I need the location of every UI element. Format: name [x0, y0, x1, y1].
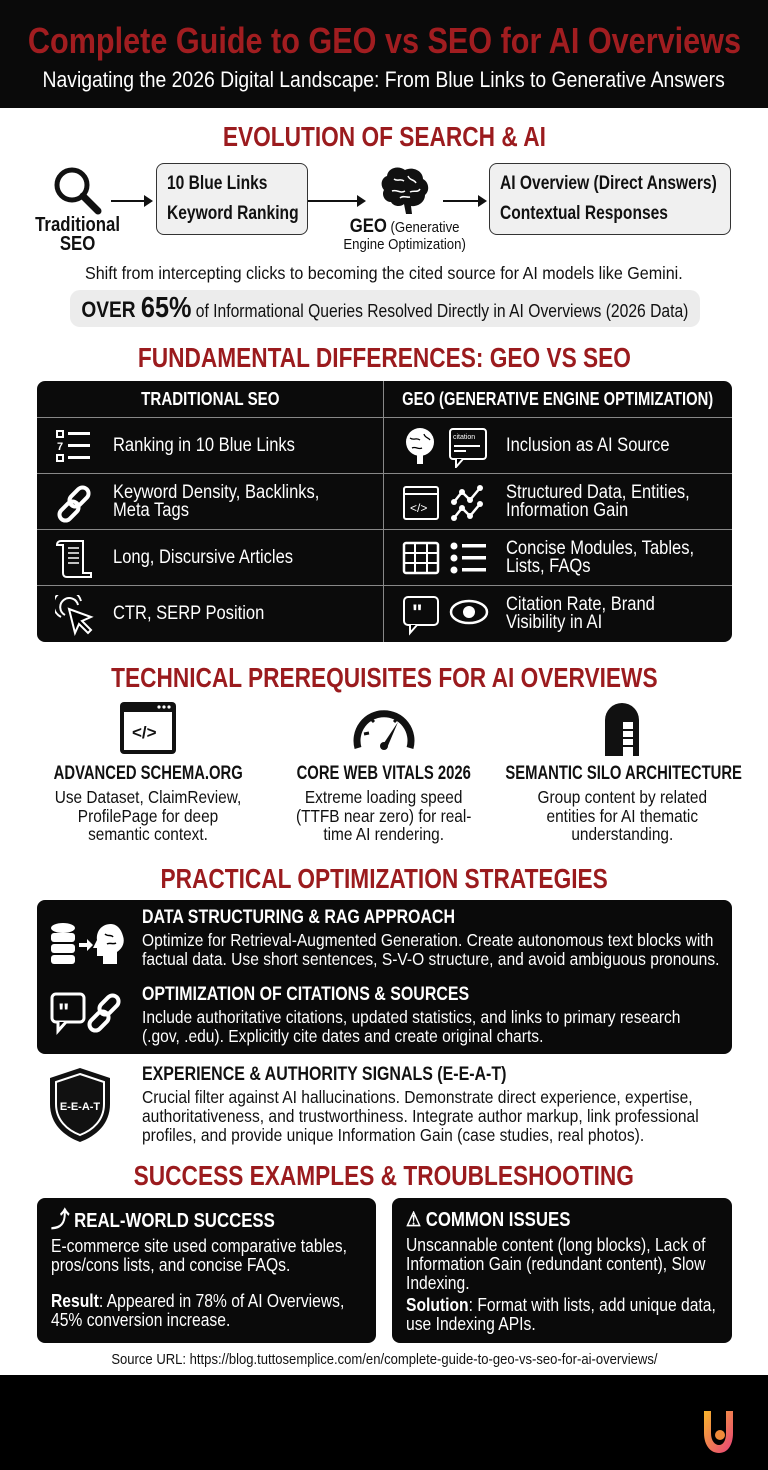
icon: logo [704, 1411, 733, 1453]
icon: EEAT shield [50, 1068, 110, 1142]
prereq: schema: ADVANCED SCHEMA.ORG [53, 763, 243, 784]
card: common issues [392, 1198, 732, 1343]
icon: database to brain [51, 923, 124, 964]
strategies dark panel [37, 900, 732, 1054]
box: blue links [156, 163, 308, 235]
prereq: core web vitals: (TTFB near zero) for real- [296, 806, 472, 826]
strategy 3: EEAT [142, 1064, 699, 1145]
row 2 seo: Meta Tags [113, 500, 189, 520]
strategy 1 [142, 907, 719, 969]
row 1 seo: 7 [57, 441, 63, 453]
text: shift: Shift from intercepting clicks to becoming the cited source for AI models like Gemini. [85, 263, 683, 283]
card: real-world success [37, 1198, 376, 1343]
label: GEO: Engine Optimization) [344, 236, 466, 253]
row 3 seo: Long, Discursive Articles [113, 546, 293, 568]
card: common issues: Solution: Format with lists, add unique data, [406, 1295, 716, 1315]
prereq: schema: Use Dataset, ClaimReview, [55, 787, 241, 807]
strategy 3: EEAT: Crucial filter against AI hallucinations. Demonstrate direct experience, expertise, [142, 1087, 693, 1107]
card: common issues: use Indexing APIs. [406, 1314, 536, 1334]
strategy 1: DATA STRUCTURING & RAG APPROACH [142, 907, 455, 928]
row 3 geo [384, 530, 732, 586]
strategy 2 [142, 984, 680, 1046]
header: GEO: GEO (GENERATIVE ENGINE OPTIMIZATION) [402, 389, 714, 409]
icon: EEAT shield: E-E-A-T [60, 1101, 100, 1113]
strategy 3: EEAT: EXPERIENCE & AUTHORITY SIGNALS (E-E-A-T) [142, 1064, 506, 1085]
card: real-world success: Result: Appeared in 78% of AI Overviews, [51, 1291, 344, 1311]
row 1 geo: citation [453, 434, 475, 441]
card: common issues: Indexing. [406, 1273, 470, 1293]
box: blue links: Keyword Ranking [167, 203, 299, 224]
arrow [308, 200, 364, 202]
prereq: semantic silo: SEMANTIC SILO ARCHITECTURE [505, 763, 742, 784]
header: traditional: TRADITIONAL SEO [141, 389, 279, 409]
stat pill: OVER 65% of Informational Queries Resolved Directly in AI Overviews (2026 Data) [81, 292, 689, 324]
row 2 geo: Information Gain [506, 500, 628, 520]
label: traditional SEO [35, 214, 120, 255]
prereq: schema [53, 702, 243, 844]
heading: success examples: SUCCESS EXAMPLES & TROUBLESHOOTING [134, 1160, 634, 1191]
prereq: core web vitals: time AI rendering. [324, 824, 444, 844]
label: GEO [344, 216, 466, 253]
box: blue links: 10 Blue Links [167, 173, 267, 194]
prereq: core web vitals [296, 710, 472, 844]
comparison table [37, 381, 732, 642]
row 3 geo: Concise Modules, Tables, [506, 538, 694, 558]
label: GEO: GEO (Generative [350, 216, 460, 237]
heading: differences: FUNDAMENTAL DIFFERENCES: GEO VS SEO [137, 342, 631, 373]
strategy 2: OPTIMIZATION OF CITATIONS & SOURCES [142, 984, 469, 1005]
source url: Source URL: https://blog.tuttosemplice.com/en/complete-guide-to-geo-vs-seo-for-ai-overviews/ [111, 1352, 657, 1368]
strategy 2: (.gov, .edu). Explicitly cite dates and create original charts. [142, 1026, 543, 1046]
header: traditional [37, 381, 384, 418]
row 3 seo [37, 530, 384, 586]
icon: code window [120, 702, 176, 754]
icon: quote & link [50, 992, 120, 1035]
row 4 geo: Citation Rate, Brand [506, 594, 655, 615]
prereq: schema: ProfilePage for deep [78, 806, 218, 826]
arrow [443, 200, 485, 202]
row 2 seo [37, 474, 384, 530]
subtitle: Navigating the 2026 Digital Landscape: From Blue Links to Generative Answers [43, 67, 725, 92]
arrow [111, 200, 151, 202]
box: AI overview: Contextual Responses [500, 203, 668, 224]
strategy 1: factual data. Use short sentences, S-V-O structure, and avoid ambiguous pronouns. [142, 949, 719, 969]
card: real-world success: E-commerce site used comparative tables, [51, 1236, 347, 1256]
prereq: semantic silo [505, 703, 742, 844]
icon: magnifier [54, 168, 102, 214]
row 2 geo [384, 474, 732, 530]
icon: silo [605, 703, 639, 756]
icon: brain [382, 168, 428, 214]
icon: code window: </> [132, 723, 157, 742]
prereq: semantic silo: understanding. [571, 824, 673, 844]
icon: quote & link: " [58, 999, 69, 1026]
prereq: schema: semantic context. [88, 824, 208, 844]
strategy 1: Optimize for Retrieval-Augmented Generation. Create autonomous text blocks with [142, 930, 713, 950]
row 2 seo: Keyword Density, Backlinks, [113, 482, 319, 502]
prereq: core web vitals: CORE WEB VITALS 2026 [297, 763, 471, 784]
footer bar [0, 1375, 768, 1470]
prereq: semantic silo: Group content by related [537, 787, 707, 807]
card: common issues: Information Gain (redundant content), Slow [406, 1254, 705, 1274]
header banner [0, 0, 768, 108]
box: AI overview: AI Overview (Direct Answers) [500, 173, 717, 194]
heading: evolution: EVOLUTION OF SEARCH & AI [222, 121, 545, 152]
row 2 geo: Structured Data, Entities, [506, 482, 690, 502]
strategy 3: EEAT: authoritativeness, and trustworthiness. Integrate author markup, link professional [142, 1106, 699, 1126]
heading: practical strategies: PRACTICAL OPTIMIZATION STRATEGIES [160, 863, 608, 894]
title: Complete Guide to GEO vs SEO for AI Overviews [27, 20, 741, 61]
row 2 geo: </> [410, 501, 427, 515]
row 4 seo [37, 586, 384, 642]
card: common issues: ⚠ COMMON ISSUES [406, 1209, 570, 1231]
header: GEO [384, 381, 732, 418]
row 4 geo: " [412, 600, 422, 625]
label: traditional SEO: Traditional [35, 214, 120, 236]
box: AI overview [489, 163, 731, 235]
card: real-world success: pros/cons lists, and concise FAQs. [51, 1255, 290, 1275]
card: real-world success: ⤴ REAL-WORLD SUCCESS [51, 1207, 275, 1232]
row 1 seo: Ranking in 10 Blue Links [113, 434, 295, 456]
row 3 geo: Lists, FAQs [506, 556, 591, 576]
prereq: semantic silo: entities for AI thematic [546, 806, 698, 826]
heading: technical prerequisites: TECHNICAL PREREQUISITES FOR AI OVERVIEWS [111, 662, 657, 693]
row 1 geo: Inclusion as AI Source [506, 434, 670, 456]
row 4 seo: CTR, SERP Position [113, 603, 264, 624]
row 1 geo [384, 418, 732, 474]
icon: speedometer [354, 710, 414, 750]
row 1 seo [37, 418, 384, 474]
flow diagram [35, 163, 731, 255]
row 4 geo [403, 594, 655, 636]
strategy 2: Include authoritative citations, updated statistics, and links to primary research [142, 1007, 680, 1027]
prereq: core web vitals: Extreme loading speed [305, 787, 463, 807]
card: real-world success: 45% conversion increase. [51, 1310, 230, 1330]
row 4 geo: Visibility in AI [506, 612, 602, 633]
label: traditional SEO: SEO [60, 233, 95, 255]
strategy 3: EEAT: profiles, and provide unique Information Gain (case studies, real photos). [142, 1125, 644, 1145]
card: common issues: Unscannable content (long blocks), Lack of [406, 1235, 705, 1255]
